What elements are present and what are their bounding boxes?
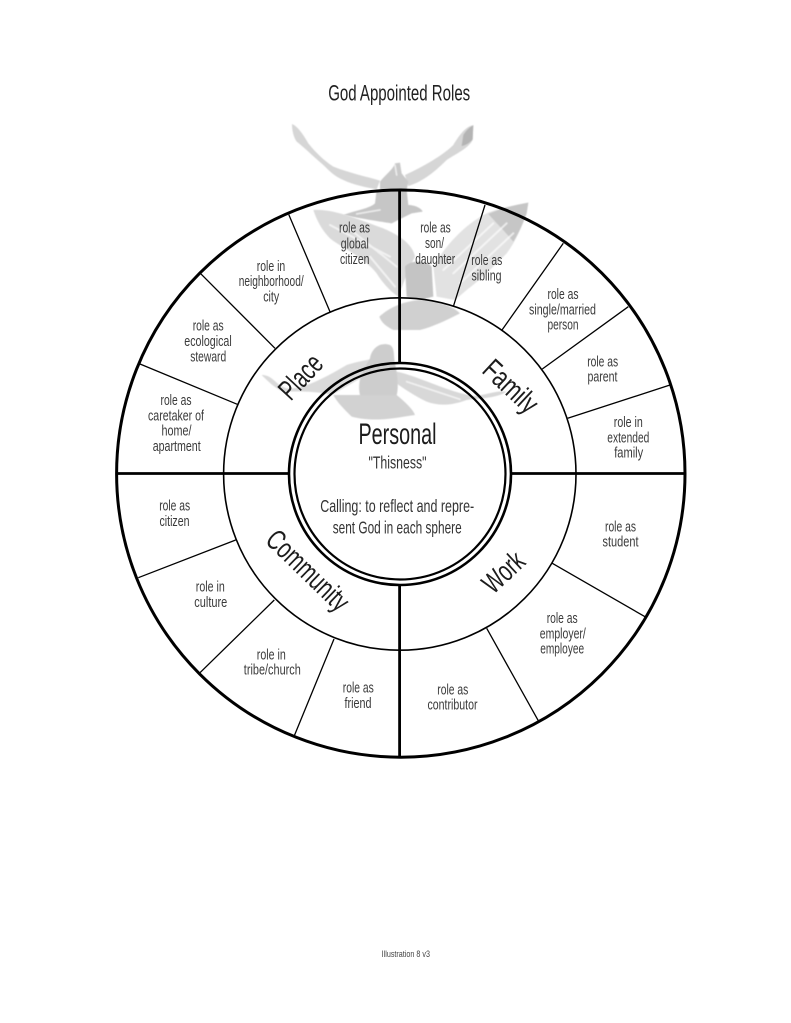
label: Community sector: Community — [259, 524, 356, 619]
role: friend: friend — [344, 696, 372, 712]
role: caretaker of home/apartment: role as — [160, 393, 192, 409]
center: Personal text: "Thisness" — [368, 452, 426, 472]
role: employer/employee: role as — [547, 611, 578, 627]
role: contributor: role as — [437, 682, 468, 698]
image: middle dove in the outer ring — [313, 203, 528, 330]
title: God Appointed Roles — [328, 81, 470, 106]
role: caretaker of home/apartment: apartment — [153, 439, 201, 455]
role: sibling: sibling — [472, 268, 502, 284]
role: single/married person: person — [548, 318, 578, 334]
role: student — [602, 519, 638, 551]
role: son/daughter — [415, 221, 455, 268]
role: son/daughter: daughter — [415, 252, 455, 268]
role: tribe/church: role in — [257, 647, 286, 663]
role: global citizen: global — [341, 236, 369, 252]
role: parent: role as — [587, 354, 618, 370]
center: Personal text: Calling: to reflect and repre- — [320, 496, 474, 516]
role: culture — [194, 580, 227, 611]
role: tribe/church: tribe/church — [244, 663, 301, 679]
role: neighborhood/city: neighborhood/ — [239, 274, 304, 290]
center: Personal text — [320, 418, 474, 537]
role: extended family: role in — [614, 415, 643, 431]
role: employer/employee: employer/ — [540, 626, 586, 642]
role: caretaker of home/apartment — [148, 393, 205, 455]
label: Family sector: Family — [476, 353, 545, 421]
role: employer/employee: employee — [540, 642, 584, 658]
role: ecological steward: role as — [193, 319, 224, 335]
role: employer/employee — [540, 611, 586, 658]
role: parent — [587, 354, 618, 386]
role: son/daughter: role as — [420, 221, 451, 237]
role: single/married person: role as — [548, 287, 578, 303]
role: sibling: role as — [471, 253, 502, 269]
role: parent: parent — [588, 370, 618, 386]
role: culture: culture — [194, 595, 227, 611]
role: sibling — [471, 253, 502, 284]
image: lower dove over the central circle — [262, 344, 507, 420]
role: neighborhood/city — [239, 259, 304, 306]
role: caretaker of home/apartment: home/ — [162, 424, 192, 440]
wheel: circles and dividers — [117, 190, 685, 757]
role: neighborhood/city: city — [263, 290, 280, 306]
role: culture: role in — [196, 580, 225, 596]
role: tribe/church — [244, 647, 301, 679]
role: single/married person — [529, 287, 596, 334]
role: citizen: role as — [159, 499, 190, 515]
role: global citizen: citizen — [340, 252, 369, 268]
role: student: role as — [605, 519, 636, 535]
role: son/daughter: son/ — [425, 236, 445, 252]
role: ecological steward — [184, 319, 232, 366]
role: ecological steward: steward — [190, 350, 226, 366]
role: student: student — [602, 535, 638, 551]
role: global citizen: role as — [339, 221, 370, 237]
role: extended family: extended — [607, 430, 649, 446]
role: global citizen — [339, 221, 370, 268]
role: citizen — [159, 499, 190, 530]
footer note: Illustration 8 v3 — [382, 949, 430, 960]
role: extended family: family — [614, 446, 644, 462]
role: extended family — [607, 415, 649, 462]
role: caretaker of home/apartment: caretaker of — [148, 408, 205, 424]
role: neighborhood/city: role in — [257, 259, 285, 275]
image: top dove with raised wings — [292, 124, 473, 223]
label: Work sector: Work — [476, 545, 532, 600]
role: contributor: contributor — [428, 698, 478, 714]
role: citizen: citizen — [160, 514, 190, 530]
role: single/married person: single/married — [529, 302, 596, 318]
center: Personal text: Personal — [358, 418, 436, 451]
role: ecological steward: ecological — [184, 334, 232, 350]
role: friend — [343, 681, 374, 712]
role: contributor — [428, 682, 478, 714]
label: Place sector: Place — [272, 348, 330, 406]
role: friend: role as — [343, 681, 374, 697]
center: Personal text: sent God in each sphere — [333, 517, 462, 537]
